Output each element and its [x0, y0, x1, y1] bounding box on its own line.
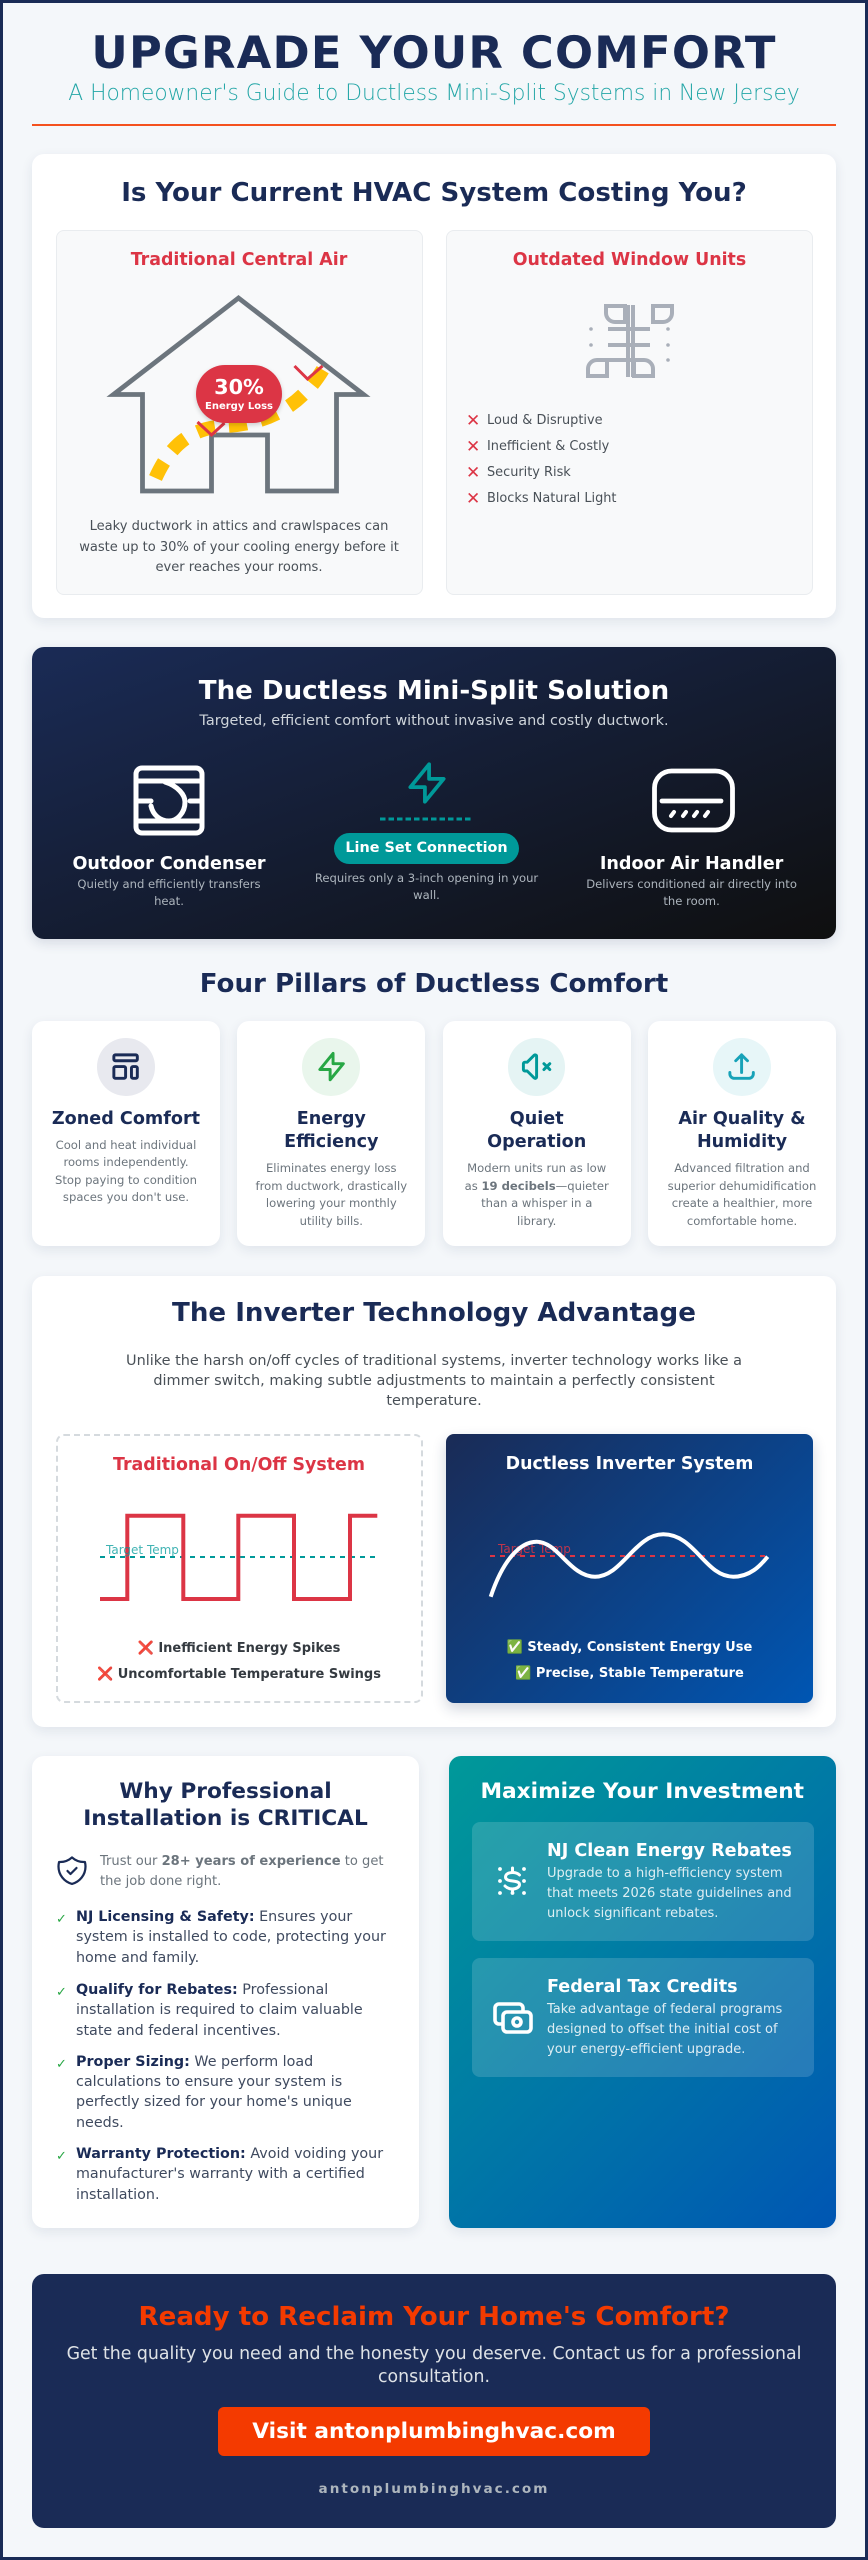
heading: air quality	[678, 1109, 806, 1152]
text: quiet operation: library.	[517, 1214, 556, 1228]
text: NJ rebates: unlock significant rebates.	[547, 1906, 718, 1921]
text: inverter benefits: ✅ Precise, Stable Temperature	[515, 1666, 744, 1681]
icon: check: ✓	[56, 2057, 67, 2072]
text: air quality: comfortable home.	[687, 1214, 797, 1228]
text: experience	[100, 1854, 384, 1889]
heading: professional installation: Installation is CRITICAL	[83, 1806, 368, 1830]
card: federal tax credits	[472, 1958, 814, 2076]
heading: energy efficiency	[284, 1109, 379, 1152]
text: inverter intro	[126, 1352, 742, 1409]
list: window unit drawbacks: ✕	[466, 411, 480, 431]
text: leaky ductwork: Leaky ductwork in attics and crawlspaces can	[90, 519, 388, 534]
text: NJ rebates	[547, 1866, 792, 1921]
list: window unit drawbacks	[466, 411, 616, 509]
subtitle: A Homeowner's Guide to Ductless Mini-Split Systems in New Jersey	[68, 81, 800, 106]
text: quiet operation	[465, 1161, 609, 1228]
heading: air quality: Air Quality &	[678, 1109, 806, 1129]
callout: 30% energy loss: Energy Loss	[205, 401, 273, 412]
text: on/off drawbacks: ❌ Uncomfortable Temperature Swings	[97, 1667, 381, 1682]
panel: traditional on/off	[56, 1434, 422, 1703]
text: experience: the job done right.	[100, 1874, 221, 1889]
heading: maximize investment: Maximize Your Investment	[480, 1779, 804, 1804]
heading: solution: The Ductless Mini-Split Solution	[199, 676, 669, 706]
column: indoor air handler	[586, 768, 797, 908]
panel: professional installation	[32, 1756, 419, 2228]
text: energy efficiency	[256, 1161, 407, 1228]
card: NJ rebates	[472, 1822, 814, 1940]
heading: traditional central air: Traditional Central Air	[131, 250, 347, 270]
icon: bolt	[408, 762, 446, 804]
card: quiet operation	[443, 1021, 631, 1246]
heading: professional installation	[83, 1779, 368, 1830]
text: rebates: installation is required to claim valuable	[76, 2002, 363, 2018]
heading: four pillars: Four Pillars of Ductless Comfort	[200, 969, 668, 999]
callout: 30% energy loss: 30%	[214, 375, 264, 399]
text: warranty: manufacturer's warranty with a certified	[76, 2166, 365, 2182]
panel: current HVAC costs	[32, 154, 836, 618]
icon: check: ✓	[56, 2149, 67, 2164]
column: outdoor condenser	[72, 766, 266, 908]
heading: air quality: Humidity	[697, 1132, 787, 1152]
text: solution intro: Targeted, efficient comfort without invasive and costly ductwork.	[199, 713, 669, 729]
icon: check: ✓	[56, 1912, 67, 1927]
heading: professional installation: Why Professional	[119, 1779, 332, 1804]
list: window unit drawbacks: ✕	[466, 437, 480, 457]
text: air quality: superior dehumidification	[668, 1179, 816, 1193]
text: experience: Trust our 28+ years of experience to get	[100, 1854, 383, 1869]
text: leaky ductwork: waste up to 30% of your cooling energy before it	[79, 540, 399, 555]
text: inverter benefits	[507, 1639, 752, 1681]
text: federal tax credits: designed to offset the initial cost of	[547, 2022, 778, 2037]
icon: condenser	[134, 766, 204, 836]
icon: window unit	[586, 304, 674, 378]
panel: ductless solution	[32, 647, 836, 939]
text: on/off drawbacks	[97, 1640, 381, 1682]
connector: dashed line	[380, 818, 470, 820]
text: indoor air handler: Delivers conditioned air directly into	[586, 876, 797, 890]
heading: federal tax credits: Federal Tax Credits	[547, 1977, 738, 1997]
text: sizing: calculations to ensure your system is	[76, 2074, 342, 2090]
text: line set: wall.	[413, 888, 440, 902]
text: NJ rebates: that meets 2026 state guidelines and	[547, 1886, 792, 1901]
text: air quality	[668, 1161, 816, 1228]
button: visit site: Visit antonplumbinghvac.com	[252, 2419, 616, 2444]
panel: maximize investment	[448, 1756, 836, 2228]
text: call to action: Get the quality you need and the honesty you deserve. Contact us for a professional	[67, 2344, 801, 2364]
icon: check: ✓	[56, 1985, 67, 2000]
text: air quality: create a healthier, more	[672, 1196, 812, 1210]
text: zoned comfort: Cool and heat individual	[56, 1138, 196, 1152]
panel: inverter technology	[32, 1276, 836, 1727]
text: energy efficiency: utility bills.	[300, 1214, 363, 1228]
list item: warranty	[56, 2146, 384, 2203]
text: quiet operation: as 19 decibels—quieter	[465, 1179, 609, 1193]
icon: shield	[57, 1856, 87, 1885]
list item: licensing	[56, 1909, 386, 1966]
list: window unit drawbacks: Inefficient & Costly	[487, 439, 609, 454]
heading: energy efficiency: Energy	[297, 1109, 366, 1129]
text: inverter benefits: ✅ Steady, Consistent Energy Use	[507, 1640, 752, 1655]
text: zoned comfort	[55, 1138, 197, 1204]
text: outdoor condenser: heat.	[154, 894, 184, 908]
text: leaky ductwork: ever reaches your rooms.	[156, 560, 322, 575]
text: indoor air handler: the room.	[663, 894, 720, 908]
icon: cash	[493, 2002, 533, 2034]
icon: house with leaky duct	[106, 295, 370, 494]
icon: air handler	[652, 768, 735, 832]
heading: inverter: The Inverter Technology Advantage	[172, 1298, 696, 1328]
text: federal tax credits	[547, 2000, 782, 2060]
heading: on/off: Traditional On/Off System	[113, 1455, 365, 1475]
heading: call to action: Ready to Reclaim Your Home's Comfort?	[139, 2302, 729, 2332]
text: sizing	[76, 2054, 352, 2131]
heading: quiet operation: Quiet	[510, 1109, 564, 1129]
card: air quality	[648, 1021, 836, 1246]
chart: on/off temperature: Target Temp	[105, 1543, 179, 1557]
text: warranty: Warranty Protection: Avoid voiding your	[76, 2146, 383, 2162]
text: line set	[315, 871, 538, 902]
text: licensing: NJ Licensing & Safety: Ensures your	[76, 1909, 352, 1925]
heading: outdoor condenser: Outdoor Condenser	[72, 854, 266, 874]
heading: energy efficiency: Efficiency	[284, 1132, 379, 1152]
panel: outdated window units	[446, 230, 813, 595]
icon: air upload	[713, 1038, 771, 1096]
text: licensing: home and family.	[76, 1950, 199, 1966]
panel: traditional central air	[56, 230, 422, 595]
heading: outdated window units: Outdated Window Units	[513, 250, 746, 270]
text: on/off drawbacks: ❌ Inefficient Energy Spikes	[138, 1641, 340, 1656]
icon: dollar	[498, 1866, 526, 1895]
text: outdoor condenser: Quietly and efficiently transfers	[77, 876, 261, 890]
heading: NJ rebates: NJ Clean Energy Rebates	[547, 1841, 792, 1861]
column: line set connection	[315, 762, 538, 902]
text: zoned comfort: spaces you don't use.	[63, 1190, 189, 1204]
icon: muted speaker	[508, 1038, 565, 1096]
callout: 30% energy loss	[196, 365, 282, 423]
text: inverter intro: dimmer switch, making subtle adjustments to maintain a perfectly consistent	[153, 1373, 715, 1389]
icon: zones	[97, 1038, 155, 1096]
text: rebates	[76, 1982, 363, 2039]
heading: costing you: Is Your Current HVAC System Costing You?	[121, 178, 747, 208]
card: energy efficiency	[237, 1021, 425, 1246]
text: website: antonplumbinghvac.com	[319, 2481, 549, 2497]
heading: indoor air handler: Indoor Air Handler	[600, 854, 783, 874]
text: energy efficiency: Eliminates energy loss	[266, 1161, 397, 1175]
text: NJ rebates: Upgrade to a high-efficiency system	[547, 1866, 783, 1881]
text: sizing: perfectly sized for your home's unique	[76, 2094, 352, 2110]
text: air quality: Advanced filtration and	[674, 1161, 810, 1175]
text: indoor air handler	[586, 876, 797, 908]
list: window unit drawbacks: ✕	[466, 463, 480, 483]
text: warranty: installation.	[76, 2187, 160, 2203]
list: window unit drawbacks: ✕	[466, 489, 480, 509]
list: window unit drawbacks: Loud & Disruptive	[487, 413, 603, 428]
text: line set: Requires only a 3-inch opening in your	[315, 871, 538, 885]
text: sizing: needs.	[76, 2115, 124, 2131]
text: licensing: system is installed to code, protecting your	[76, 1929, 386, 1945]
text: energy efficiency: from ductwork, drastically	[256, 1179, 407, 1193]
text: federal tax credits: your energy-efficient upgrade.	[547, 2042, 745, 2057]
text: zoned comfort: Stop paying to condition	[55, 1173, 197, 1187]
panel: call to action	[32, 2274, 836, 2528]
icon: energy bolt	[302, 1038, 360, 1096]
list: window unit drawbacks: Blocks Natural Light	[487, 491, 616, 506]
text: energy efficiency: lowering your monthly	[266, 1196, 397, 1210]
chart: inverter temperature: Target Temp	[497, 1542, 571, 1556]
text: sizing: Proper Sizing: We perform load	[76, 2054, 313, 2070]
text: call to action	[32, 2342, 836, 2388]
text: zoned comfort: rooms independently.	[63, 1155, 189, 1169]
list: window unit drawbacks: Security Risk	[487, 465, 571, 480]
pill: line set connection	[334, 833, 519, 864]
text: rebates: state and federal incentives.	[76, 2023, 281, 2039]
heading: zoned comfort: Zoned Comfort	[52, 1109, 200, 1129]
text: warranty	[76, 2146, 384, 2203]
card: zoned comfort	[32, 1021, 220, 1246]
text: leaky ductwork	[79, 519, 399, 575]
panel: ductless inverter	[446, 1434, 813, 1703]
heading: quiet operation	[487, 1109, 586, 1152]
text: quiet operation: than a whisper in a	[481, 1196, 592, 1210]
pill: line set connection: Line Set Connection	[345, 840, 508, 856]
text: outdoor condenser	[77, 876, 261, 908]
text: rebates: Qualify for Rebates: Professional	[76, 1982, 328, 1998]
text: quiet operation: Modern units run as low	[467, 1161, 606, 1175]
button: visit site	[218, 2407, 650, 2456]
heading: ductless inverter: Ductless Inverter System	[506, 1454, 753, 1474]
chart: on/off temperature	[100, 1514, 378, 1601]
chart: inverter temperature	[488, 1532, 770, 1598]
text: inverter intro: temperature.	[386, 1393, 482, 1409]
text: call to action: consultation.	[378, 2366, 490, 2386]
text: inverter intro: Unlike the harsh on/off cycles of traditional systems, inverter technology works like a	[126, 1352, 742, 1368]
list item: sizing	[56, 2054, 352, 2131]
heading: quiet operation: Operation	[487, 1132, 586, 1152]
title: UPGRADE YOUR COMFORT	[91, 26, 777, 79]
text: licensing	[76, 1909, 386, 1966]
list item: rebates	[56, 1982, 363, 2039]
text: federal tax credits: Take advantage of federal programs	[547, 2002, 782, 2017]
